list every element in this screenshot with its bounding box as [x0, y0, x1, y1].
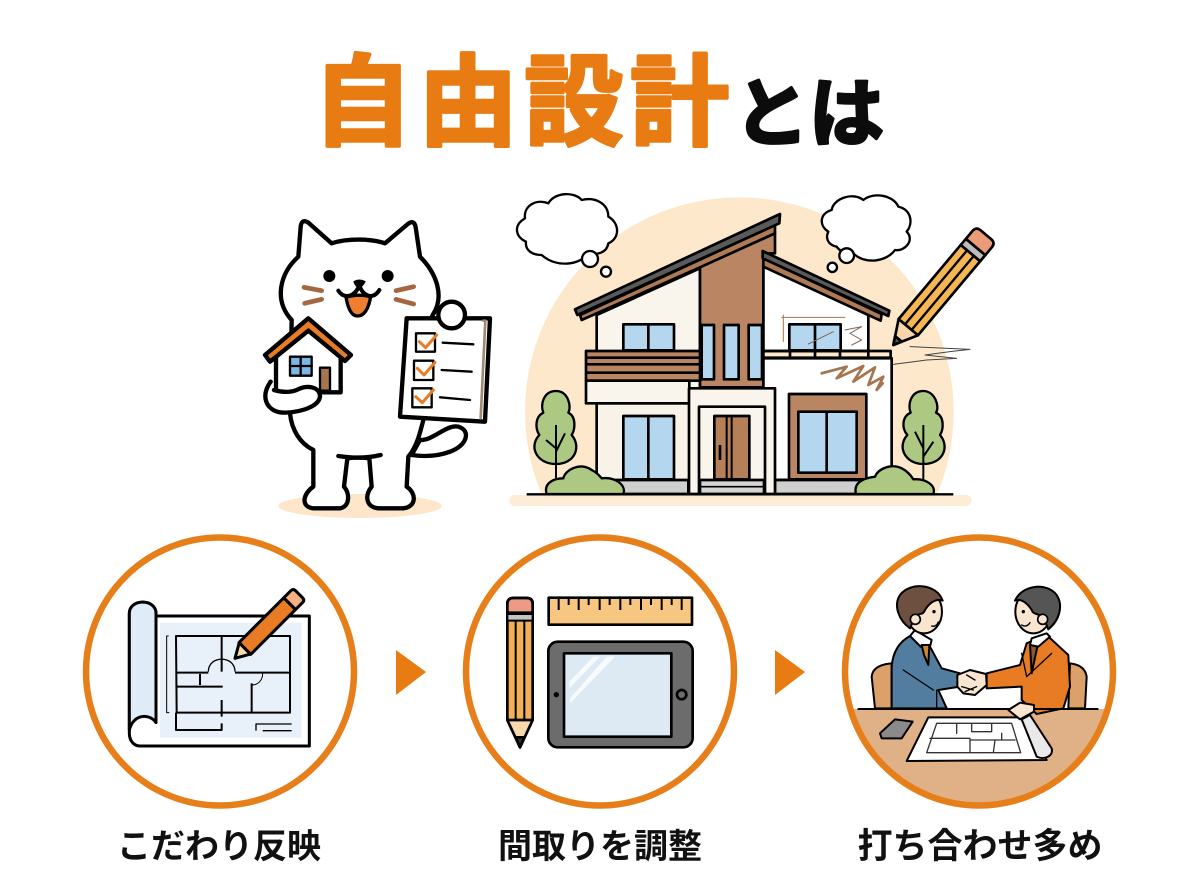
hand on plan [1008, 703, 1034, 719]
entrance [689, 388, 775, 494]
arm [265, 382, 320, 413]
scribbles [782, 315, 970, 390]
person right [987, 587, 1070, 714]
step 3: meeting circle [840, 538, 1120, 819]
foundation [597, 480, 892, 494]
chairs [872, 663, 892, 708]
label: step 3: 打ち合わせ多め [857, 827, 1103, 866]
cat face [304, 270, 414, 316]
icon: blueprint with pencil [129, 588, 309, 746]
arrow 2 [775, 650, 805, 695]
illustration: house with thought clouds and pencil [509, 193, 995, 506]
balcony [586, 351, 891, 403]
clipboard [400, 302, 490, 422]
title: とは [734, 72, 884, 156]
icon: pencil, ruler and tablet [507, 598, 693, 747]
icon: two people shaking hands over a floor plan [858, 586, 1098, 761]
label: step 1: こだわり反映 [117, 828, 321, 866]
small house [265, 318, 351, 392]
thought cloud right [822, 195, 910, 272]
roof right [763, 251, 889, 321]
roof left [575, 214, 780, 320]
windows upper [623, 324, 841, 379]
tree left [534, 391, 576, 480]
illustration: cat holding house and checklist [265, 221, 490, 518]
table edge [858, 706, 1098, 712]
step 1: blueprint circle [86, 538, 354, 806]
handshake [957, 670, 987, 695]
bushes [546, 466, 934, 494]
plan [907, 717, 1047, 761]
tree right [903, 391, 945, 480]
pencil [884, 227, 996, 353]
phone [880, 719, 913, 738]
sun background [509, 192, 996, 506]
building walls [597, 233, 892, 494]
title: 自由設計 [313, 47, 729, 158]
garage window [789, 394, 866, 479]
step 2: tools circle [466, 538, 734, 806]
label: step 2: 間取りを調整 [498, 828, 702, 866]
thought cloud left [517, 194, 617, 277]
ground line [527, 491, 953, 498]
person left [892, 586, 960, 708]
window lower left [623, 416, 674, 479]
arrow 1 [396, 650, 426, 695]
table [854, 709, 1104, 802]
paper roll [1022, 715, 1052, 758]
